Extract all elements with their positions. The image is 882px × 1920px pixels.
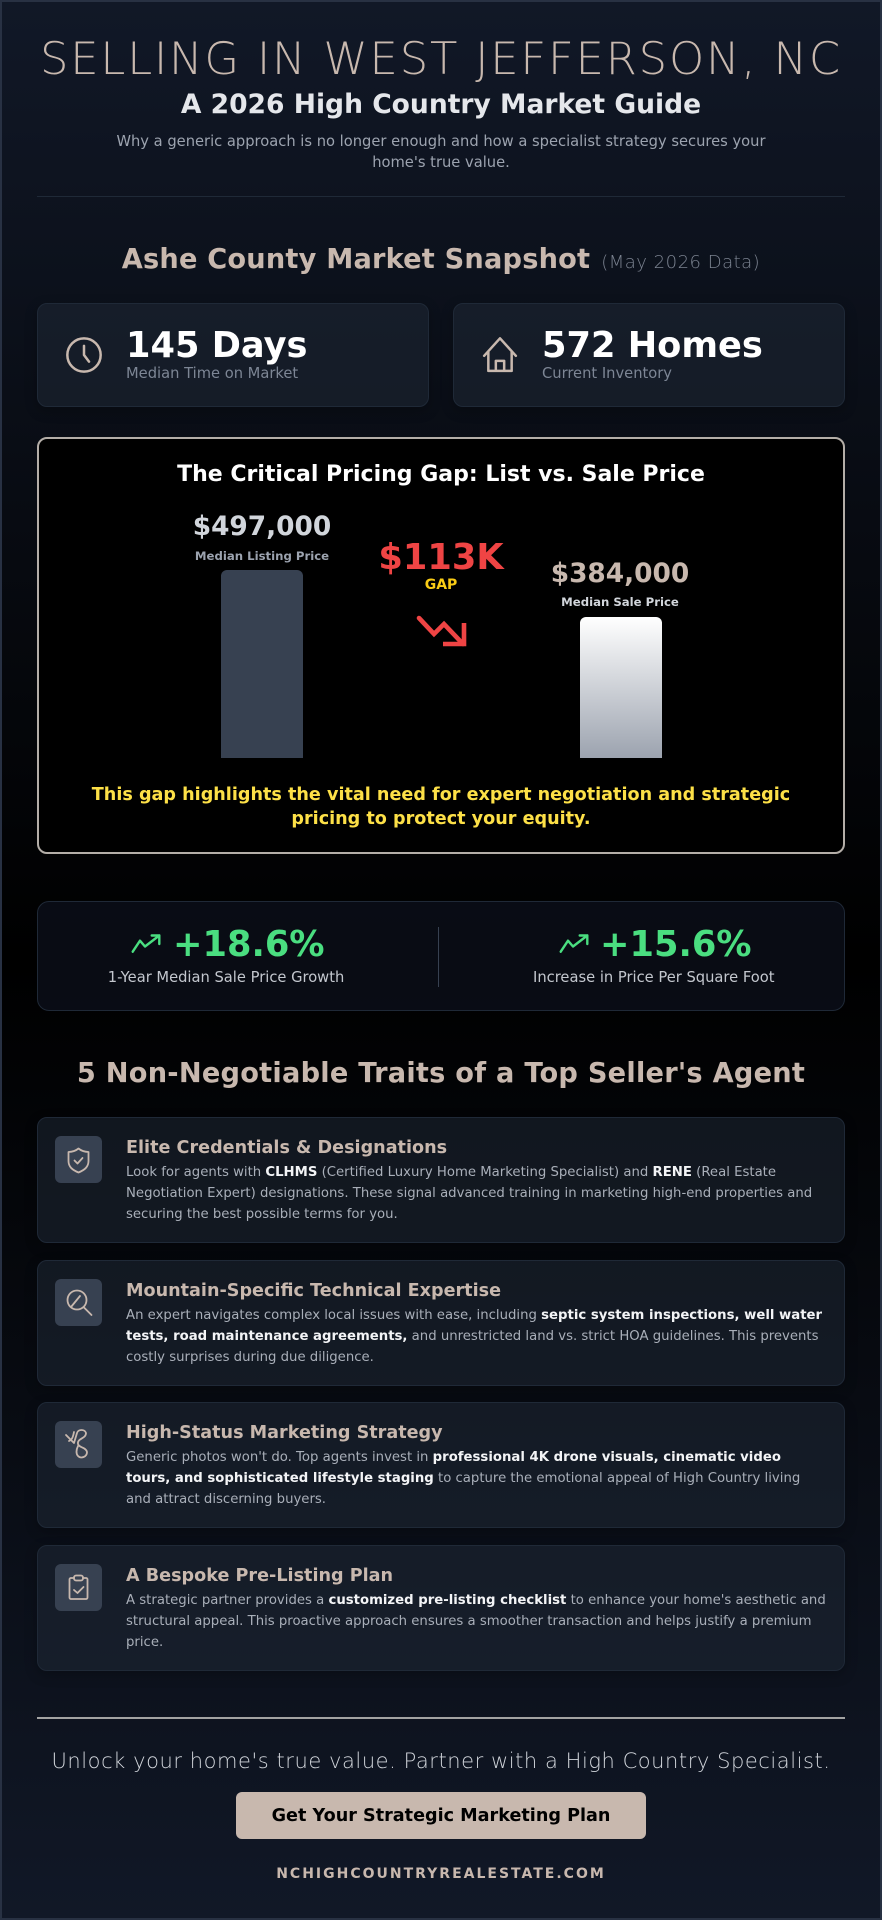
gap value: $113K <box>378 537 504 578</box>
bar: listing price <box>221 570 303 758</box>
trait body <box>126 1308 822 1365</box>
website: NCHIGHCOUNTRYREALESTATE.COM <box>276 1866 606 1882</box>
trait body: and attract discerning buyers. <box>126 1492 326 1507</box>
panel heading: The Critical Pricing Gap: List vs. Sale Price <box>177 462 705 487</box>
trait title: A Bespoke Pre-Listing Plan <box>126 1566 393 1586</box>
stat label: Median Time on Market <box>126 365 298 382</box>
section heading: market snapshot: Ashe County Market Snapshot (May 2026 Data) <box>122 244 760 275</box>
growth label: Increase in Price Per Square Foot <box>533 969 774 986</box>
trait body <box>126 1593 826 1650</box>
icon: clock <box>66 337 102 373</box>
trait title: Elite Credentials & Designations <box>126 1138 447 1158</box>
trait body: price. <box>126 1635 163 1650</box>
label: sale price: Median Sale Price <box>561 595 679 609</box>
stat value: 145 Days <box>126 325 307 366</box>
button <box>236 1792 646 1839</box>
value: sale price: $384,000 <box>551 558 689 589</box>
icon: down arrow <box>416 616 466 646</box>
caption: This gap highlights the vital need for expert negotiation and strategic <box>92 785 790 805</box>
icon: house <box>482 337 518 372</box>
stat value: 572 Homes <box>542 325 763 366</box>
trait body: Generic photos won't do. Top agents invest in professional 4K drone visuals, cinematic video <box>126 1450 781 1465</box>
vertical divider <box>438 927 439 987</box>
header divider <box>37 196 845 197</box>
call to action text: Unlock your home's true value. Partner with a High Country Specialist. <box>52 1749 830 1773</box>
callout: gap <box>378 537 505 646</box>
intro text: Why a generic approach is no longer enough and how a specialist strategy secures your <box>116 133 766 150</box>
subtitle: A 2026 High Country Market Guide <box>181 89 701 120</box>
trait body: structural appeal. This proactive approach ensures a smoother transaction and helps justify a premium <box>126 1614 812 1629</box>
intro text: home's true value. <box>372 154 510 171</box>
trait body <box>126 1165 812 1222</box>
icon: shield <box>55 1136 102 1183</box>
growth value: +18.6% <box>173 924 325 965</box>
chart: listing price column <box>193 511 331 758</box>
panel: trait mountain expertise <box>37 1260 845 1386</box>
section heading: traits: 5 Non-Negotiable Traits of a Top Seller's Agent <box>77 1058 805 1089</box>
panel: trait pre-listing plan <box>37 1545 845 1671</box>
label: listing price: Median Listing Price <box>195 549 329 563</box>
value: listing price: $497,000 <box>193 511 331 542</box>
panel: trait marketing strategy <box>37 1402 845 1528</box>
icon: trending up <box>560 934 588 953</box>
trait body: costly surprises during due diligence. <box>126 1350 374 1365</box>
trait body: securing the best possible terms for you. <box>126 1207 398 1222</box>
panel: trait elite credentials <box>37 1117 845 1243</box>
panel: growth stats <box>37 901 845 1011</box>
stat: sale price growth <box>108 924 344 986</box>
footer divider <box>37 1717 845 1719</box>
title: SELLING IN WEST JEFFERSON, NC <box>40 32 842 85</box>
bar: sale price <box>580 617 662 758</box>
icon: trending up <box>132 934 160 953</box>
caption: pricing to protect your equity. <box>291 809 591 829</box>
trait body: Look for agents with CLHMS (Certified Luxury Home Marketing Specialist) and RENE (Real Estate <box>126 1165 776 1180</box>
trait body: An expert navigates complex local issues with ease, including septic system inspections, well water <box>126 1308 822 1323</box>
stat: price per square foot <box>533 924 774 986</box>
button: Get Your Strategic Marketing Plan <box>272 1806 610 1826</box>
trait body: tests, road maintenance agreements, and unrestricted land vs. strict HOA guidelines. This prevents <box>126 1329 819 1344</box>
panel: current inventory <box>453 303 845 407</box>
caption <box>92 785 790 829</box>
icon: squiggle <box>55 1421 102 1468</box>
growth value: +15.6% <box>600 924 752 965</box>
panel: pricing gap <box>37 437 845 854</box>
trait body: Negotiation Expert) designations. These signal advanced training in marketing high-end properties and <box>126 1186 812 1201</box>
trait body <box>126 1450 800 1507</box>
growth label: 1-Year Median Sale Price Growth <box>108 969 344 986</box>
trait title: Mountain-Specific Technical Expertise <box>126 1281 501 1301</box>
trait body: tours, and sophisticated lifestyle staging to capture the emotional appeal of High Country living <box>126 1471 800 1486</box>
trait body: A strategic partner provides a customized pre-listing checklist to enhance your home's aesthetic and <box>126 1593 826 1608</box>
stat label: Current Inventory <box>542 365 672 382</box>
icon: magnifier <box>55 1279 102 1326</box>
trait title: High-Status Marketing Strategy <box>126 1423 443 1443</box>
icon: clipboard <box>55 1564 102 1611</box>
chart: sale price column <box>551 558 689 758</box>
gap label: GAP <box>425 577 457 593</box>
intro text <box>116 133 766 171</box>
panel: median time on market <box>37 303 429 407</box>
